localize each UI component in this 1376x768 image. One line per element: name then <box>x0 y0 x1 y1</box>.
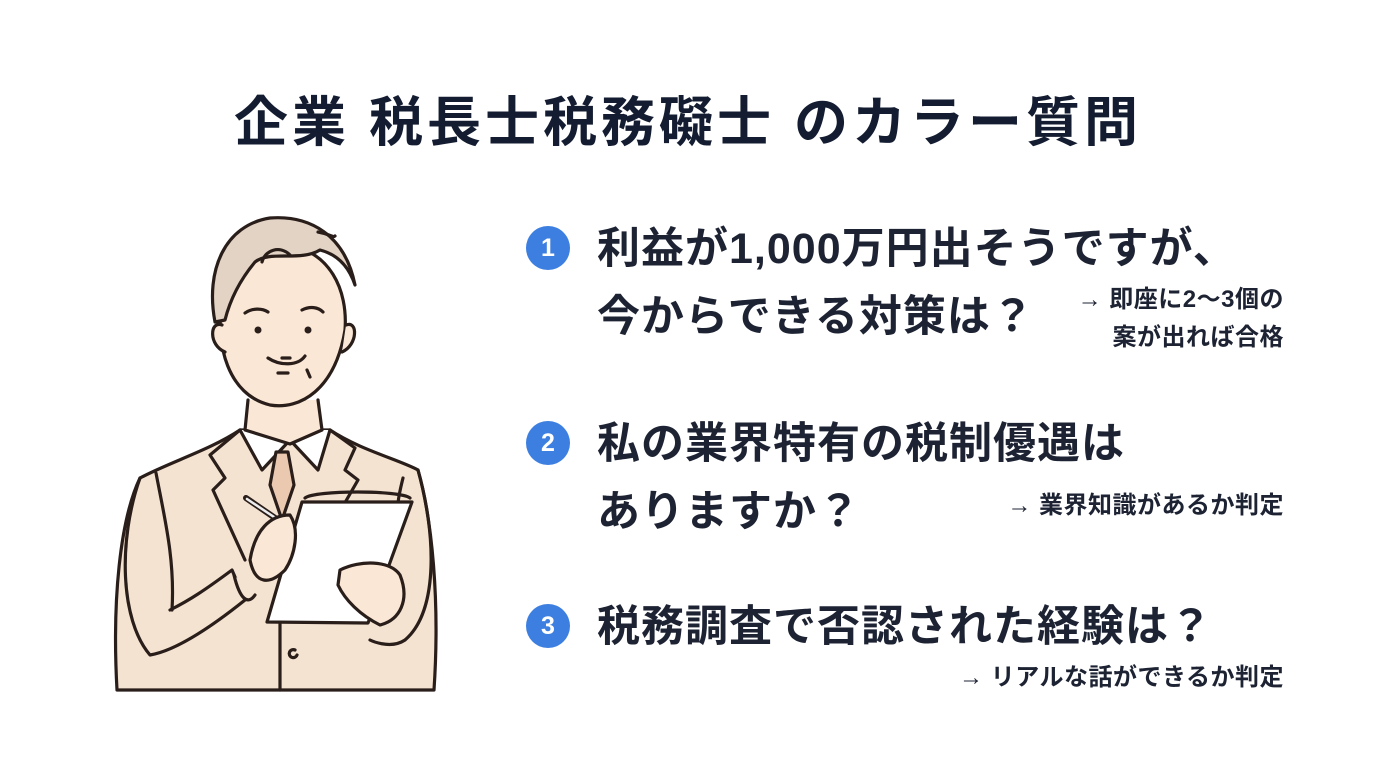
question 1: 今からできる対策は？ <box>597 293 1035 341</box>
question 3: 税務調査で否認された経験は？ <box>597 603 1213 651</box>
note 1: → 即座に2〜3個の <box>1078 286 1284 313</box>
illustration: businessman with notepad <box>114 216 438 692</box>
question 2 <box>597 420 1125 536</box>
question 1: 利益が1,000万円出そうですが、 <box>597 225 1237 273</box>
item 1 <box>526 225 1284 351</box>
number badge 3 <box>526 604 570 648</box>
title: 企業 税長士税務礙士 のカラー質問 <box>234 93 1142 153</box>
question 2: ありますか？ <box>597 488 861 536</box>
question 1 <box>597 225 1237 341</box>
number badge 1: 1 <box>541 234 555 262</box>
note 3: → リアルな話ができるか判定 <box>959 664 1284 691</box>
number badge 1 <box>526 226 570 270</box>
note 1: 案が出れば合格 <box>1112 324 1284 351</box>
note 1 <box>1078 286 1284 351</box>
item 3 <box>526 603 1284 691</box>
question 2: 私の業界特有の税制優遇は <box>597 420 1125 468</box>
note 2: → 業界知識があるか判定 <box>1007 492 1284 519</box>
number badge 2 <box>526 421 570 465</box>
number badge 3: 3 <box>541 612 555 640</box>
item 2 <box>526 420 1284 536</box>
number badge 2: 2 <box>541 429 555 457</box>
